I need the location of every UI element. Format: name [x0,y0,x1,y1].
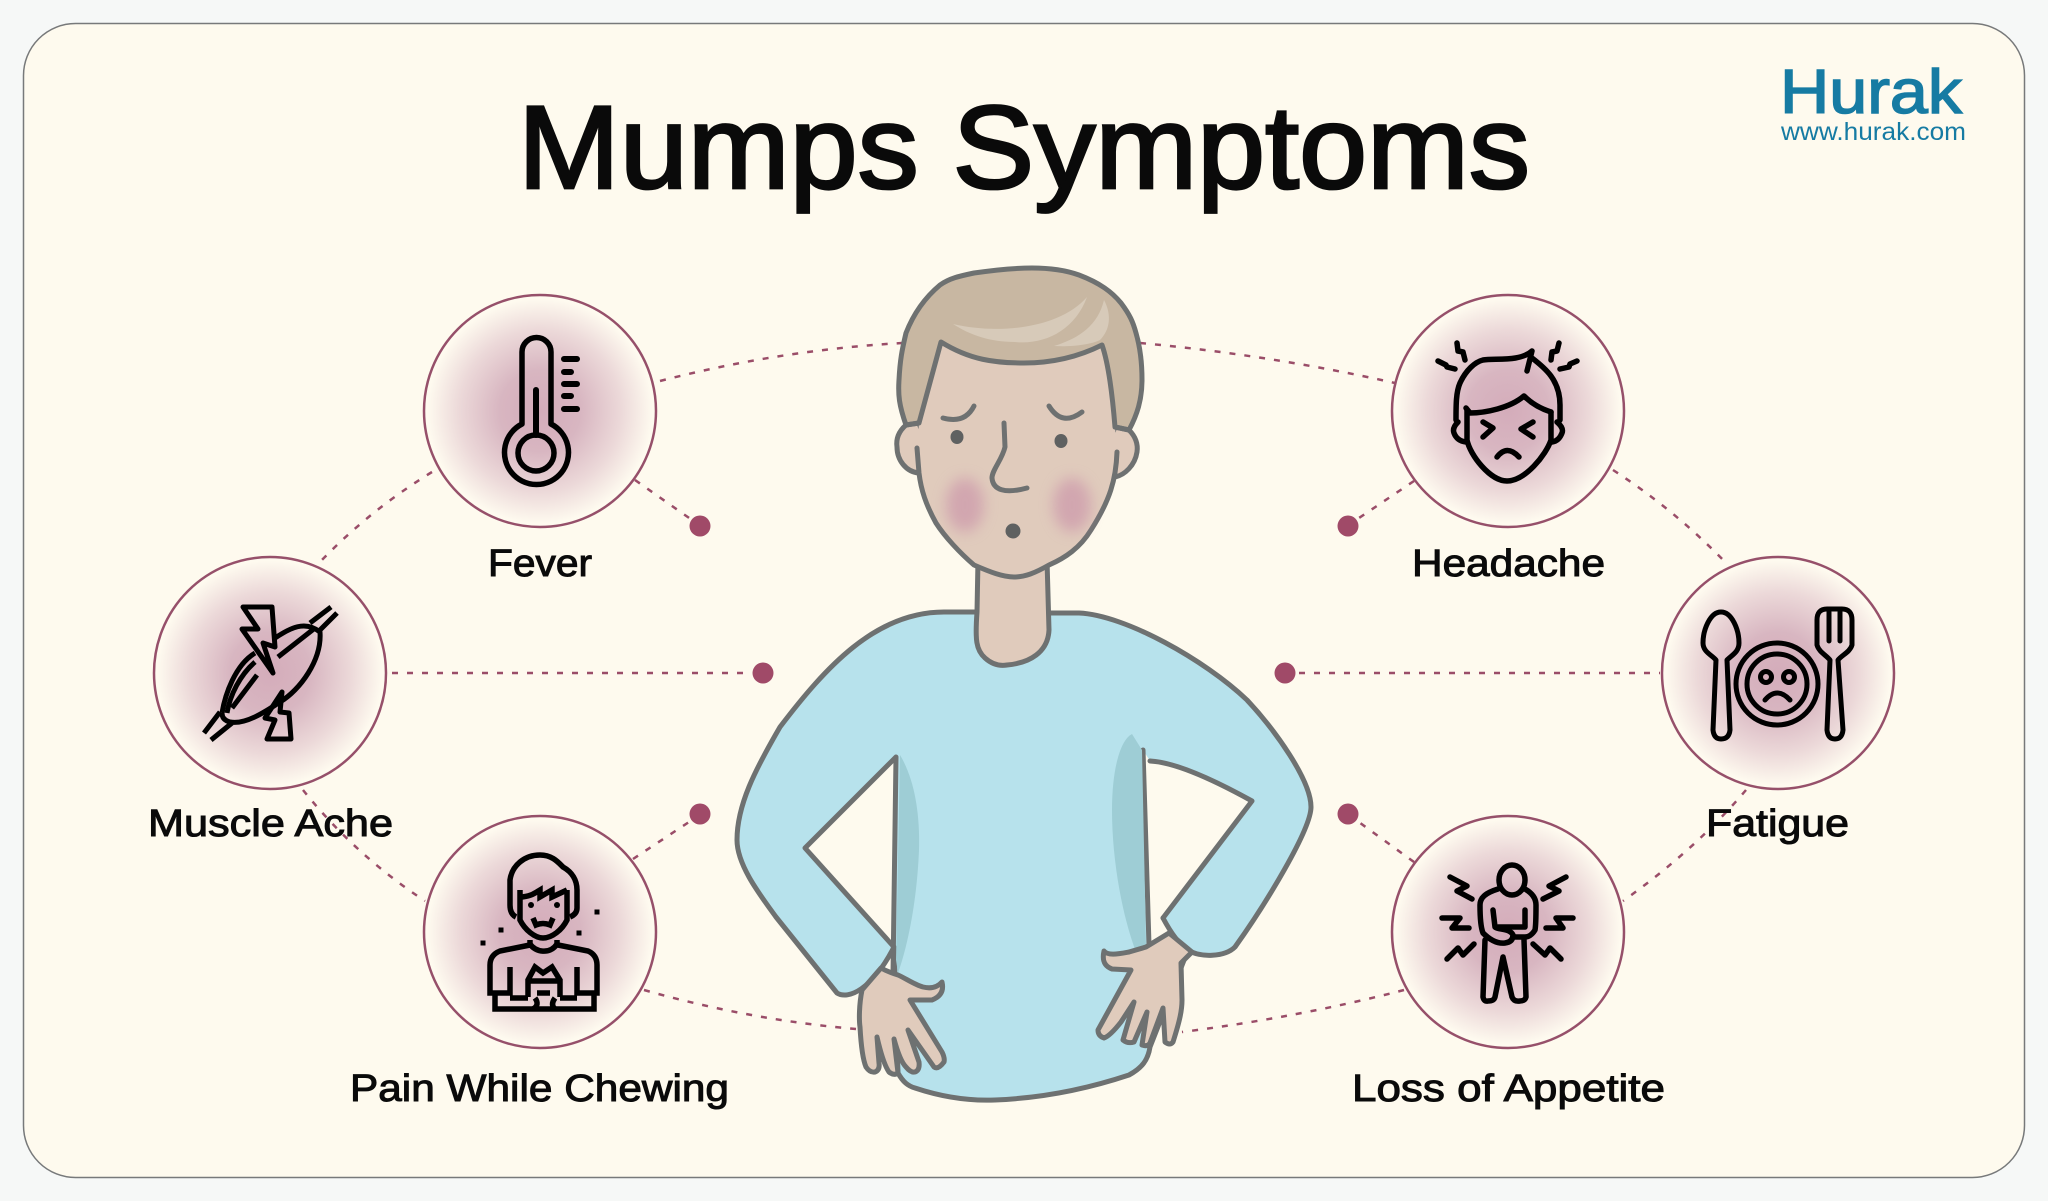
left arm gap [805,757,896,975]
panel: headache [1392,295,1624,585]
pain while chewing circle [424,816,656,1048]
logo url: www.hurak.com [1780,118,1966,146]
icon: muscle [204,607,337,740]
icon: stomach pain person [1442,865,1573,1001]
icon: plate with spoon and fork [1703,609,1852,739]
right arm gap [1143,750,1252,950]
panel: fever [424,295,656,585]
cheeks [946,478,1091,532]
hair highlights [953,297,1087,342]
mouth [1006,524,1020,538]
sleeve cuff right [1163,918,1188,950]
face [917,342,1117,577]
icon: chewing person [490,855,597,1009]
shirt [737,612,1311,1100]
fever circle [424,295,656,527]
logo name: Hurak [1780,58,1963,127]
central figure [737,268,1311,1100]
label: fever: Fever [488,543,592,585]
panel: loss of appetite [1352,816,1665,1110]
loss of appetite circle [1392,816,1624,1048]
headache circle [1392,295,1624,527]
hairline [906,342,1129,430]
panel: pain while chewing [350,816,729,1110]
right hand [1098,933,1192,1046]
dotted connector lines [303,343,1746,1032]
right ear [1110,427,1137,477]
face outline [917,448,1117,577]
shirt shadows [896,755,919,973]
left hand [859,968,944,1074]
panel: muscle ache [148,557,393,845]
left ear [897,423,925,473]
eyebrows [943,406,1082,420]
icon: headache face [1438,343,1577,481]
connector dots [690,516,1358,824]
label: pain while chewing: Pain While Chewing [350,1068,729,1110]
muscle ache circle [154,557,386,789]
panel: fatigue [1662,557,1894,845]
hair [899,268,1142,440]
title: Mumps Symptoms [518,82,1530,214]
label: muscle ache: Muscle Ache [148,803,393,845]
icon: thermometer [504,338,577,485]
nose [992,423,1027,491]
neck [976,560,1049,665]
eyes [950,430,1068,448]
label: fatigue: Fatigue [1706,803,1849,845]
fatigue circle [1662,557,1894,789]
label: headache: Headache [1412,543,1605,585]
logo [1780,58,1966,146]
label: loss of appetite: Loss of Appetite [1352,1068,1665,1110]
face and pain dots [480,902,600,946]
